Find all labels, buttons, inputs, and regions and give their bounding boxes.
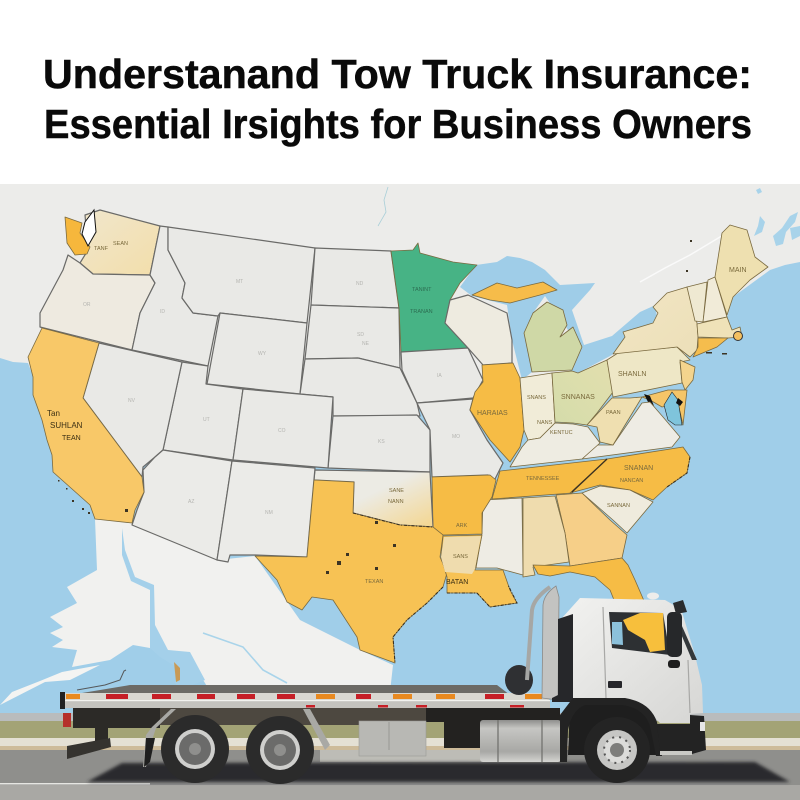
tank strap bbox=[498, 720, 542, 762]
state: Vermont bbox=[687, 282, 707, 322]
mirror top arm bbox=[673, 600, 687, 614]
state labels: west: WY bbox=[258, 351, 267, 357]
channel bbox=[122, 528, 205, 690]
rear cab dark strip bbox=[552, 614, 573, 702]
lower pavement bbox=[0, 785, 800, 800]
state labels: east: SEAN bbox=[113, 241, 128, 247]
gulf coast jagged outline bbox=[353, 457, 690, 663]
state labels: east: TENNESSEE bbox=[526, 476, 560, 482]
headache rack post bbox=[542, 586, 559, 700]
state: Maine bbox=[715, 225, 768, 315]
state: Mississippi bbox=[476, 498, 523, 575]
state: Kentucky bbox=[510, 423, 600, 467]
state labels: east: SANNAN bbox=[607, 503, 630, 509]
state labels: east: TANINT bbox=[412, 287, 432, 293]
state: Maryland and Delaware bbox=[642, 390, 687, 425]
rear fender bbox=[143, 709, 176, 767]
rear chassis bbox=[73, 708, 160, 745]
state labels: west: SD bbox=[357, 332, 364, 338]
state labels: west: CO bbox=[278, 428, 286, 434]
state labels: east: SNNANAS bbox=[561, 394, 595, 401]
front chassis bbox=[426, 708, 560, 748]
state: Oklahoma bbox=[314, 470, 433, 527]
peninsula tail bbox=[0, 665, 100, 705]
ocean bbox=[0, 184, 800, 714]
title banner bbox=[0, 0, 800, 184]
state labels: east: NANN bbox=[388, 499, 404, 505]
mirror knob bbox=[668, 660, 680, 668]
upper rail bbox=[65, 693, 549, 700]
state labels: west: ID bbox=[160, 309, 165, 315]
Louisiana upper shade bbox=[441, 536, 481, 574]
state labels: west: MO bbox=[452, 434, 460, 440]
title line 1: Understanand Tow Truck Insurance: bbox=[43, 51, 752, 97]
cab body bbox=[562, 598, 703, 723]
state: Washington bbox=[80, 210, 160, 275]
cable bbox=[77, 670, 126, 690]
headlight bbox=[700, 722, 705, 731]
state labels: west: NV bbox=[128, 398, 136, 404]
window reflection: sky bbox=[612, 622, 623, 645]
state labels: east: SNANS bbox=[527, 395, 546, 401]
TN and NC border bbox=[572, 459, 607, 492]
headache rack tube bbox=[527, 587, 550, 680]
state: South Dakota bbox=[305, 305, 400, 368]
lower rail bbox=[65, 700, 550, 708]
state: Connecticut and Long Island bbox=[693, 338, 728, 357]
state: California bbox=[28, 328, 144, 523]
spare tire bbox=[505, 665, 533, 695]
curb bbox=[0, 746, 800, 750]
state labels: east: SANE bbox=[389, 488, 404, 494]
state labels: west: KS bbox=[378, 439, 385, 445]
state labels: east: ARK bbox=[456, 523, 468, 529]
toolbox seam bbox=[388, 722, 390, 750]
amber reflectors bbox=[66, 694, 542, 699]
under-bed panel bbox=[160, 708, 426, 725]
behind front wheel dark mass bbox=[568, 702, 660, 755]
roof beacon bbox=[647, 592, 659, 600]
rear light bar bbox=[60, 692, 65, 709]
state: New Mexico bbox=[217, 461, 315, 562]
window reflection: orange map bbox=[623, 613, 665, 652]
state labels: east: TEXAN bbox=[365, 579, 383, 585]
state labels: east bbox=[94, 241, 746, 586]
rail highlight bbox=[65, 700, 550, 701]
sidewalk bbox=[0, 738, 800, 746]
state: Michigan lower bbox=[524, 302, 582, 372]
state: Oregon bbox=[40, 255, 155, 350]
state: Idaho bbox=[132, 226, 218, 366]
state labels: east: BATAN bbox=[446, 579, 468, 586]
truck shadow bbox=[87, 762, 790, 782]
chesapeake bay bbox=[664, 392, 682, 425]
state: Iowa bbox=[401, 348, 483, 403]
light road patch bbox=[320, 750, 490, 762]
state labels: California: TEAN bbox=[62, 435, 81, 442]
state labels: California bbox=[47, 409, 83, 442]
rail reflectors bbox=[106, 694, 524, 708]
state: Colorado bbox=[233, 389, 333, 468]
boston marker bbox=[734, 332, 742, 340]
tail light bbox=[63, 713, 71, 727]
state: Florida bbox=[533, 558, 648, 625]
river bbox=[203, 633, 287, 683]
state labels: east: HARAIAS bbox=[477, 410, 508, 417]
state: New Jersey bbox=[680, 360, 695, 390]
state labels: east: TRANAN bbox=[410, 309, 433, 315]
state labels: California: Tan bbox=[47, 409, 60, 418]
state: Puget coast orange bbox=[65, 217, 90, 255]
state: Illinois bbox=[470, 363, 524, 462]
bed wall bbox=[82, 685, 510, 700]
rear wheel 2 bbox=[246, 716, 314, 784]
windscreen bbox=[676, 617, 697, 660]
inlet bbox=[174, 662, 180, 682]
state: Louisiana bbox=[441, 535, 517, 607]
state: Texas bbox=[255, 480, 447, 663]
state labels: east: SANS bbox=[453, 554, 468, 560]
road bbox=[0, 750, 800, 785]
wheel arch bbox=[560, 698, 662, 762]
mudflap bbox=[144, 738, 155, 767]
great lakes bbox=[460, 256, 660, 380]
state: Wyoming bbox=[207, 313, 307, 394]
state labels: west: AZ bbox=[188, 499, 194, 505]
rear wheel 1 bbox=[161, 715, 229, 783]
land: north bbox=[0, 184, 800, 420]
flatbed tow truck bbox=[60, 586, 706, 784]
state: Kansas bbox=[328, 415, 430, 472]
front wheel bbox=[584, 717, 650, 783]
state labels: west: OR bbox=[83, 302, 91, 308]
bumper step bbox=[660, 751, 692, 755]
state labels: east: NANS bbox=[537, 420, 553, 426]
state: Michigan upper bbox=[472, 282, 557, 303]
state: Tennessee bbox=[492, 459, 607, 499]
state: New York bbox=[613, 287, 698, 357]
state: South Carolina bbox=[582, 486, 653, 533]
roadside background bbox=[0, 713, 800, 800]
state labels: west: NE bbox=[362, 341, 370, 347]
state: Massachusetts bbox=[697, 317, 742, 338]
state labels: west: UT bbox=[203, 417, 210, 423]
state labels: east: KENTUC bbox=[550, 430, 573, 436]
puget sound bbox=[82, 210, 96, 246]
state: Montana bbox=[168, 227, 315, 323]
state: North Dakota bbox=[311, 248, 399, 308]
state labels: east: MAIN bbox=[729, 267, 746, 274]
state labels: west: IA bbox=[437, 373, 442, 379]
window bbox=[609, 612, 670, 655]
barrier bbox=[0, 713, 800, 721]
coast islands and dots bbox=[58, 240, 727, 574]
state labels: east: SHANLN bbox=[618, 371, 646, 378]
state labels: west: NM bbox=[265, 510, 273, 516]
state labels: west: MT bbox=[236, 279, 243, 285]
northern waters bbox=[754, 188, 800, 246]
state labels: east: SNANAN bbox=[624, 465, 653, 472]
fuel tank bbox=[480, 720, 561, 762]
middle fender bbox=[303, 709, 330, 750]
state: Georgia bbox=[556, 493, 627, 566]
state labels: west: ND bbox=[356, 281, 364, 287]
lane line bbox=[0, 783, 150, 784]
states bbox=[28, 210, 768, 663]
state labels: east: TANF bbox=[94, 246, 109, 252]
state labels: west bbox=[83, 279, 460, 516]
state: Arkansas bbox=[432, 475, 496, 535]
state: North Carolina bbox=[570, 447, 690, 500]
state: New Hampshire bbox=[703, 277, 727, 322]
state: Arizona bbox=[132, 450, 232, 560]
door outline bbox=[603, 607, 690, 713]
state: Virginia bbox=[582, 402, 680, 459]
state: Indiana bbox=[520, 373, 555, 440]
state: Missouri bbox=[417, 399, 503, 483]
toolbox bbox=[359, 721, 426, 756]
state: Alabama bbox=[523, 496, 569, 577]
mirror bbox=[667, 612, 682, 657]
land: south and west bbox=[50, 519, 393, 692]
grass bbox=[0, 721, 800, 738]
state labels: east: PAAN bbox=[606, 410, 621, 416]
state: West Virginia bbox=[587, 397, 642, 445]
map of the United States bbox=[0, 184, 800, 714]
state: Nevada bbox=[83, 343, 182, 477]
state: Ohio bbox=[552, 360, 613, 425]
door handle bbox=[608, 681, 622, 688]
state: Wisconsin bbox=[445, 295, 512, 365]
rear plate bbox=[67, 738, 111, 759]
state: Nebraska bbox=[300, 358, 420, 416]
title line 2: Essential Irsights for Business Owners bbox=[44, 101, 752, 147]
bay islands bbox=[644, 394, 683, 406]
state labels: California: SUHLAN bbox=[50, 421, 83, 430]
state: Utah bbox=[163, 362, 243, 460]
state labels: east: NANCAN bbox=[620, 478, 643, 484]
state: Minnesota bbox=[391, 243, 477, 352]
bumper bbox=[657, 715, 706, 754]
state: Pennsylvania bbox=[607, 347, 690, 397]
